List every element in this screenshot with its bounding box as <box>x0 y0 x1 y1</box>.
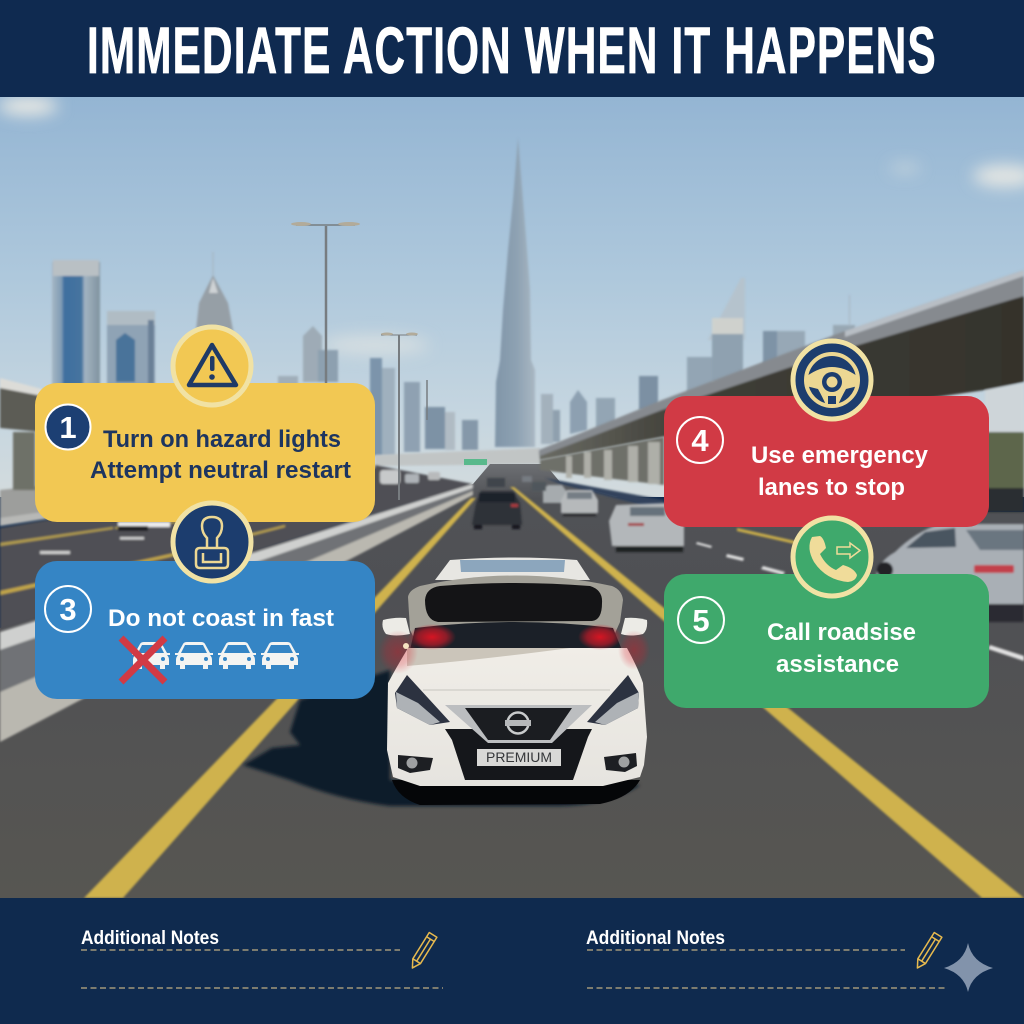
distant cross bridge <box>375 448 540 466</box>
bridge piers <box>540 437 664 485</box>
icon: gear shift <box>173 503 251 581</box>
footer band <box>0 898 1024 1024</box>
roadside barrier right <box>545 478 664 511</box>
hood underside <box>425 583 602 622</box>
engine bay <box>410 622 622 650</box>
panel: step 1 hazard lights <box>35 327 375 522</box>
text: step 4: lanes to stop <box>758 474 905 501</box>
left overpass <box>0 378 42 490</box>
title: IMMEDIATE ACTION WHEN IT HAPPENS <box>87 13 936 87</box>
header band <box>0 0 1024 97</box>
number badge 3 <box>45 586 91 632</box>
lower bumper <box>445 729 592 780</box>
text: step 1: Attempt neutral restart <box>90 457 351 484</box>
crease <box>423 689 610 691</box>
licence plate <box>477 749 561 766</box>
left carriageway and barrier <box>0 465 473 742</box>
grille <box>445 705 592 743</box>
text: step 1: Turn on hazard lights <box>103 426 341 453</box>
icon: four cars <box>132 642 299 669</box>
main car with open hood <box>243 558 650 806</box>
icon: red cross <box>121 638 165 682</box>
number badge 1 <box>46 404 90 450</box>
panel: step 4 emergency lanes <box>664 341 989 527</box>
roof and sunroof <box>435 558 590 580</box>
text: step 4 <box>751 442 929 501</box>
skyline buildings left <box>52 252 478 456</box>
text: step 4: Use emergency <box>751 442 929 469</box>
text: step 5: Call roadsise <box>767 619 916 646</box>
background highway scene <box>0 97 1024 898</box>
number badge 5 <box>678 597 724 643</box>
skyline buildings right <box>541 278 855 444</box>
green overhead sign <box>464 459 487 465</box>
logo <box>505 712 531 734</box>
Burj tower <box>495 138 535 447</box>
licence plate: PREMIUM <box>486 750 552 765</box>
icon: pencil right <box>914 933 942 970</box>
hazard glows <box>378 624 650 674</box>
icon: pencil left <box>409 933 437 970</box>
headlights <box>395 675 450 725</box>
sky <box>0 97 1024 497</box>
open hood <box>408 576 623 640</box>
icon: sparkle <box>944 943 993 992</box>
number badge 5: 5 <box>692 603 710 638</box>
white lane dashes <box>696 542 1024 661</box>
under-car dark <box>392 780 640 805</box>
notes block left: Additional Notes <box>81 928 219 949</box>
panel: step 5 roadside assistance <box>664 574 989 708</box>
text: step 5 <box>767 619 916 678</box>
panel: step 3 do not coast <box>35 561 375 699</box>
icon: phone with arrow <box>793 518 871 596</box>
car shadow <box>243 670 640 806</box>
fog lamps <box>398 753 637 773</box>
text: step 5: assistance <box>776 651 899 678</box>
icon: steering wheel <box>793 341 871 419</box>
notes block right: Additional Notes <box>586 928 725 949</box>
street lamps <box>291 222 427 500</box>
text: step 1 <box>90 426 351 484</box>
right overpass <box>539 270 1024 512</box>
number badge 1: 1 <box>59 410 77 445</box>
car body <box>387 648 647 786</box>
distant traffic <box>472 476 1024 622</box>
hood shading <box>407 648 570 666</box>
yellow lane lines <box>84 487 1024 898</box>
number badge 3: 3 <box>59 592 77 627</box>
number badge 4 <box>677 417 723 463</box>
clouds <box>0 97 1024 355</box>
road surface <box>0 464 1024 898</box>
mirrors <box>382 618 410 636</box>
number badge 4: 4 <box>691 423 709 458</box>
text: step 3: Do not coast in fast <box>108 605 334 632</box>
icon: warning triangle <box>173 327 251 405</box>
